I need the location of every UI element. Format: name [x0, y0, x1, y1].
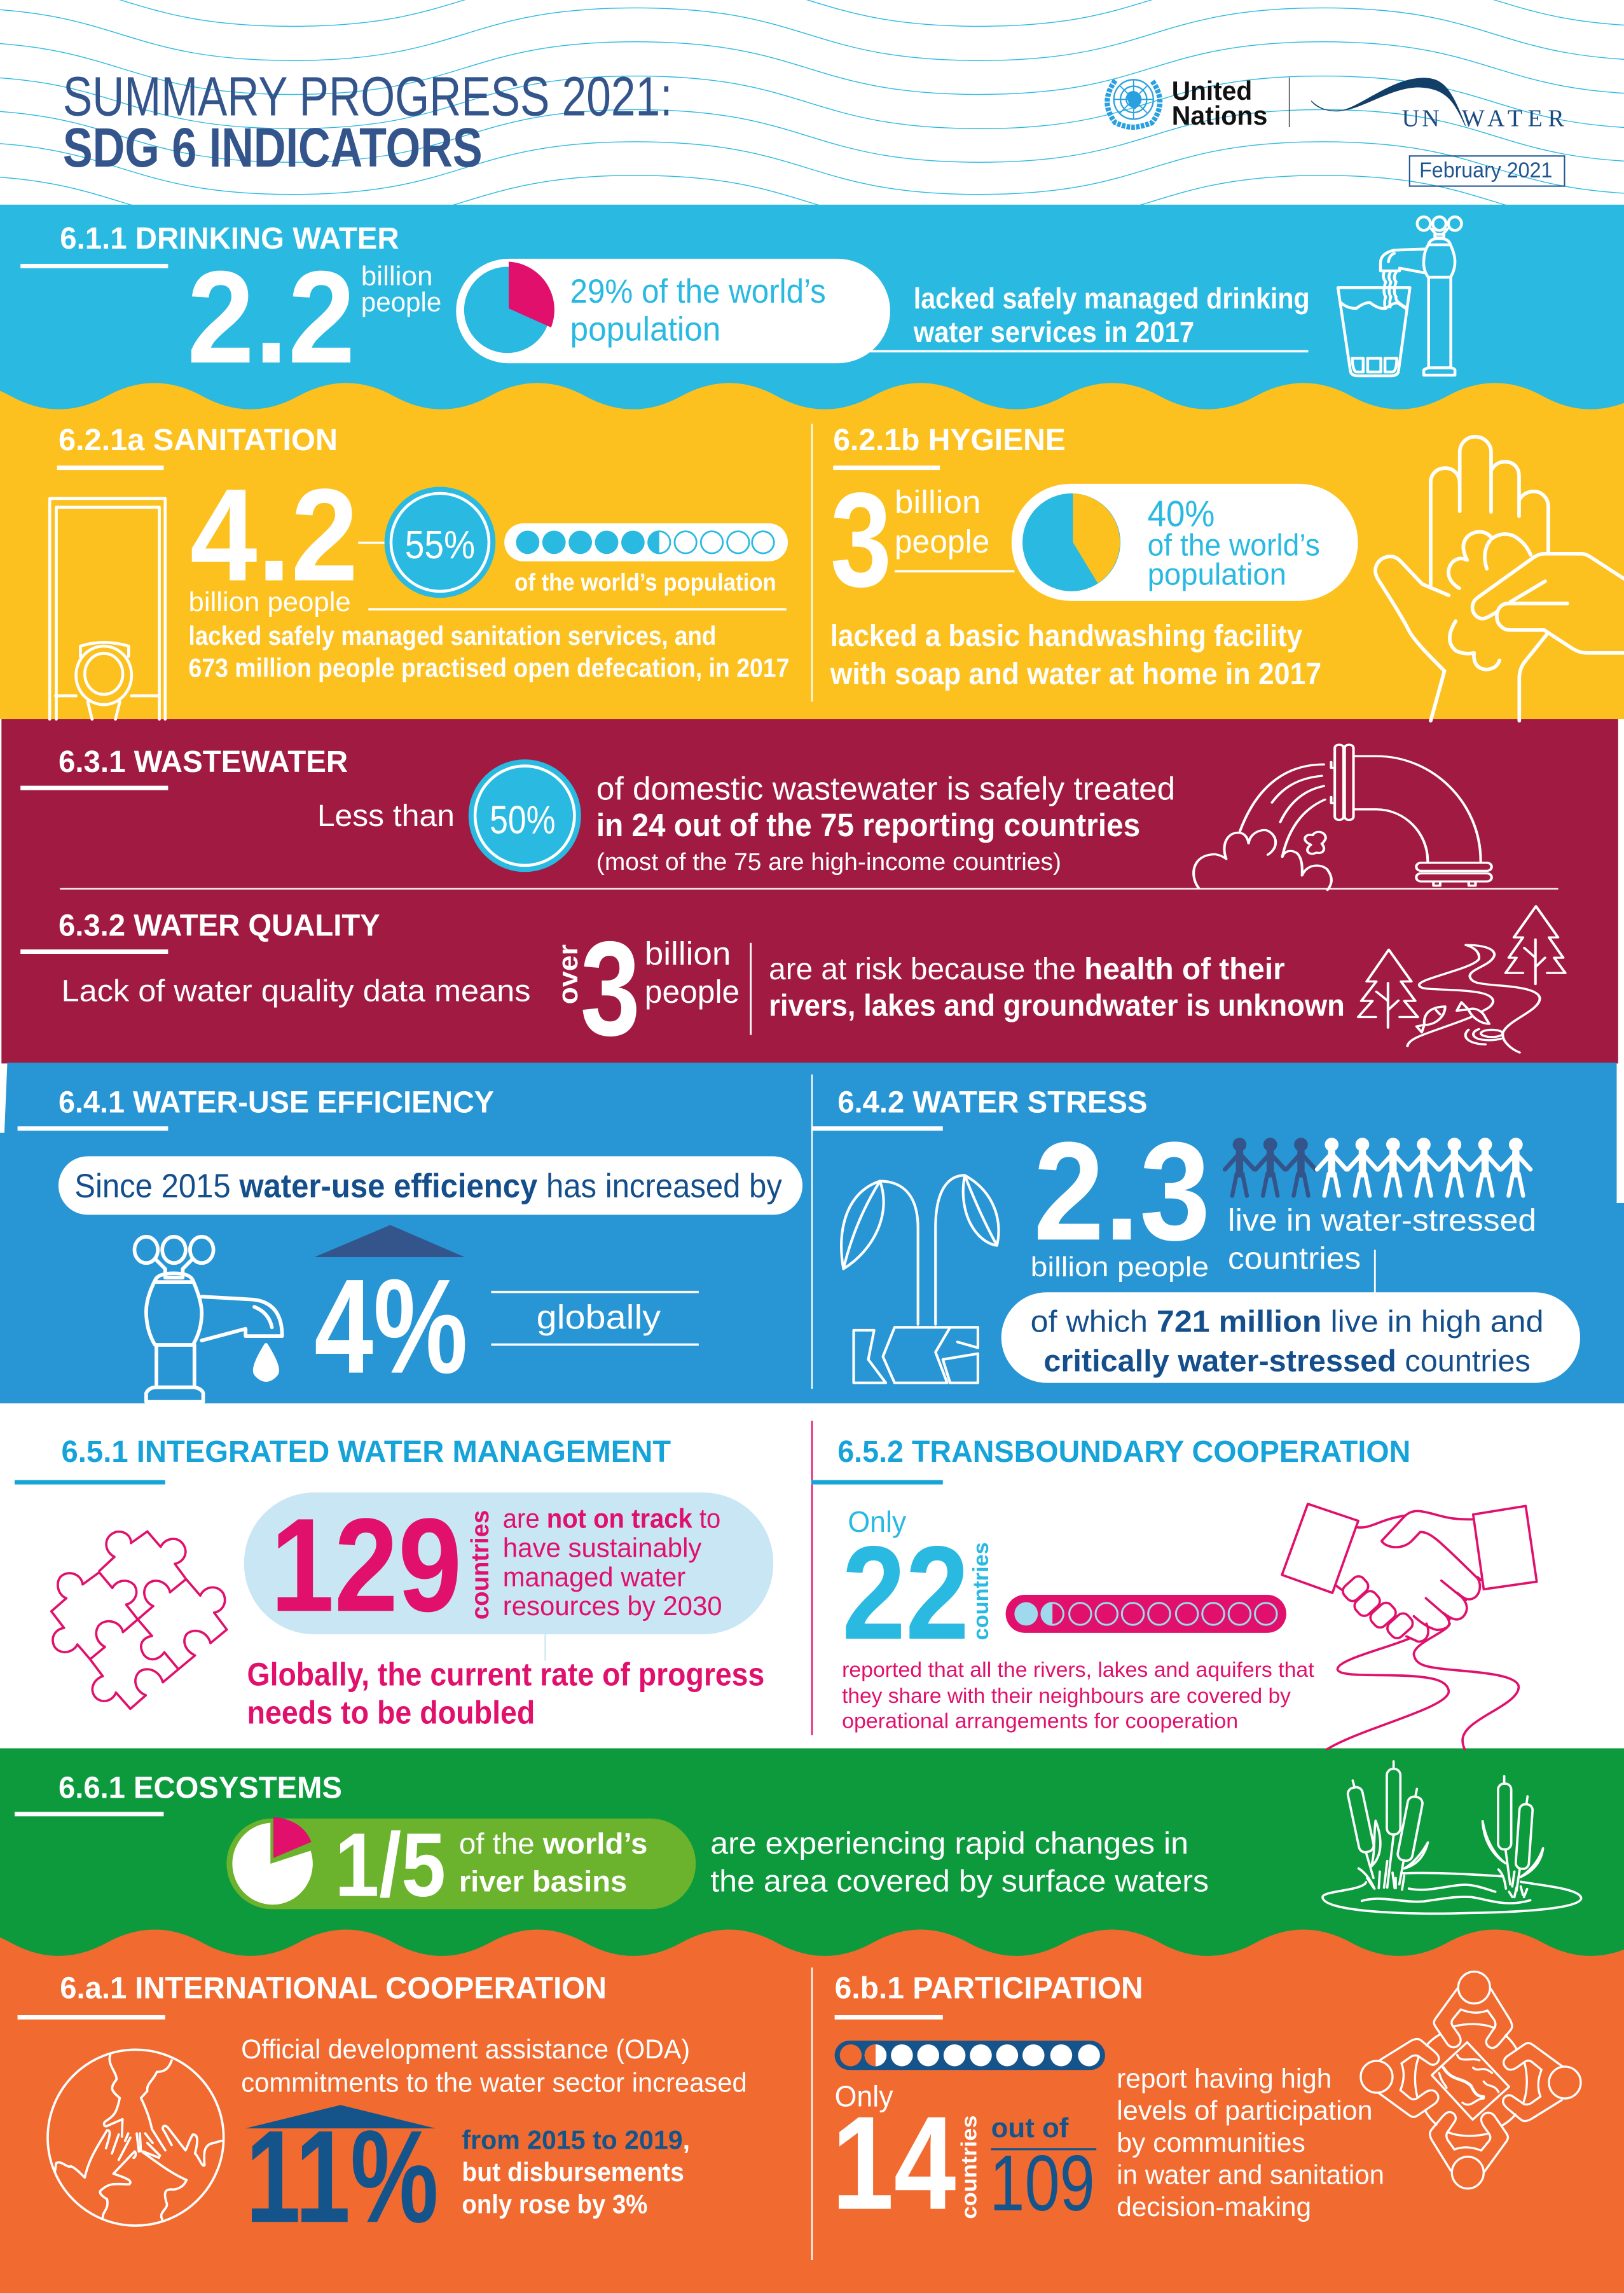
big number 11%: 11%	[245, 2103, 439, 2250]
heading: 6.6.1: 6.6.1 ECOSYSTEMS	[58, 1771, 342, 1805]
text: from 2015 to 2019: from 2015 to 2019,	[462, 2125, 690, 2154]
heading: 6.a.1: 6.a.1 INTERNATIONAL COOPERATION	[60, 1971, 607, 2006]
big number: only 22 countries: 22	[842, 1519, 969, 1667]
dot scale: 55% of the world's population	[504, 523, 788, 596]
heading: 6.3.1	[20, 745, 348, 790]
text: live in water-stressed	[1228, 1203, 1536, 1293]
panel: ecosystems background	[0, 1748, 1624, 1960]
pill with pie: 29%: population	[570, 311, 720, 348]
big number: only 14 countries out of 109	[832, 2080, 1096, 2238]
text: sanitation services	[189, 608, 789, 682]
icon: washing hands	[1375, 437, 1624, 720]
pill: 129 countries	[244, 1491, 773, 1639]
pill: 721 million	[1001, 1292, 1580, 1383]
icon: reeds in pond	[1323, 1761, 1581, 1913]
text: lacked safely managed drinking water	[862, 282, 1310, 352]
dot scale: 55% of the world's population: of the world’s population	[514, 570, 776, 596]
heading: 6.1.1	[20, 221, 399, 268]
icon: outflow pipe	[1194, 745, 1492, 890]
panel: cooperation and participation background	[0, 1930, 1624, 2293]
pill: 129 countries: are not on track to	[503, 1504, 720, 1534]
big number 3 billion people	[830, 465, 1014, 615]
arrow: increase	[245, 2105, 436, 2128]
text: domestic wastewater	[596, 770, 1175, 876]
text: sanitation services: lacked safely managed sanitation services, and	[189, 621, 716, 651]
title	[63, 65, 672, 179]
text: from 2015 to 2019	[462, 2125, 690, 2219]
text: lacked safely managed drinking water: lacked safely managed drinking	[914, 282, 1310, 315]
text: reported: operational arrangements for cooperation	[842, 1709, 1238, 1733]
section 6.1.1 drinking water	[20, 217, 1461, 390]
people chain: three in ten	[1225, 1138, 1531, 1195]
text: rate of progress: Globally, the current rate of progress	[247, 1656, 764, 1693]
big number 2.2 billion people: 2.2	[187, 244, 355, 390]
text: report having high: by communities	[1117, 2128, 1305, 2158]
text: reported	[842, 1658, 1314, 1733]
big number 4.2 billion people: billion people	[189, 588, 351, 617]
text: official development assistance	[241, 2035, 747, 2098]
text: report having high	[1117, 2064, 1384, 2222]
text: rate of progress: needs to be doubled	[247, 1694, 535, 1730]
heading: 6.a.1	[18, 1971, 607, 2020]
heading: 6.4.1	[18, 1085, 494, 1131]
big number: only 22 countries: countries	[969, 1542, 993, 1640]
text: lack of data: Lack of water quality data means	[62, 974, 530, 1009]
header background waves	[0, 0, 1624, 228]
pill with pie: 29%	[456, 259, 890, 363]
heading: 6.1.1: 6.1.1 DRINKING WATER	[60, 221, 399, 256]
heading: 6.b.1: 6.b.1 PARTICIPATION	[835, 1971, 1143, 2006]
icon: tap and glass	[1338, 217, 1461, 376]
heading: 6.5.1	[15, 1435, 671, 1484]
big number: only 22 countries: Only	[848, 1505, 906, 1538]
big number 3 billion people: billion	[895, 484, 981, 520]
text: domestic wastewater: in 24 out of the 75 reporting countries	[596, 807, 1140, 843]
logo: United Nations: Nations	[1172, 101, 1267, 130]
heading: 6.4.2	[811, 1085, 1148, 1131]
text: at risk: are at risk because the health of their	[769, 952, 1285, 986]
heading: 6.3.2: 6.3.2 WATER QUALITY	[58, 908, 380, 942]
text: report having high: report having high	[1117, 2064, 1332, 2094]
big number 2.2 billion people: billion	[361, 261, 432, 291]
pill: since 2015	[58, 1156, 802, 1215]
text: from 2015 to 2019: but disbursements	[462, 2158, 684, 2187]
circle: 55%: 55%	[405, 523, 475, 567]
heading: 6.2.1a: 6.2.1a SANITATION	[58, 423, 338, 457]
big number: over 3 billion people: billion	[645, 935, 731, 972]
big number: only 14 countries out of 109: 14	[832, 2090, 956, 2238]
panel: sanitation and hygiene background	[0, 383, 1624, 719]
text: at risk: rivers, lakes and groundwater is unknown	[769, 989, 1345, 1023]
heading: 6.4.2: 6.4.2 WATER STRESS	[837, 1085, 1148, 1119]
icon: river, trees and fish	[1358, 906, 1566, 1052]
icon: handshake and river	[1282, 1504, 1537, 1749]
logo: UN Water	[1290, 78, 1564, 132]
section 6.5.1 integrated water management	[15, 1435, 773, 1730]
heading: 6.6.1	[15, 1771, 342, 1816]
heading: 6.4.1: 6.4.1 WATER-USE EFFICIENCY	[58, 1085, 494, 1119]
divider: efficiency stress	[811, 1075, 813, 1389]
section 6.4.1 water-use efficiency	[18, 1085, 802, 1402]
icon: dripping tap	[134, 1237, 282, 1402]
text: rapid changes: the area covered by surface waters	[710, 1864, 1209, 1899]
big number 4%: 4%	[314, 1251, 468, 1401]
pill with pie: 40%: population	[1148, 558, 1286, 592]
logo: United Nations	[1107, 76, 1267, 130]
big number 2.2 billion people: people	[361, 288, 441, 318]
pill: 129 countries: 129	[270, 1491, 462, 1639]
pill with pie: 40%	[1012, 484, 1358, 601]
heading: 6.5.1: 6.5.1 INTEGRATED WATER MANAGEMENT	[62, 1435, 671, 1469]
divider: management cooperation	[811, 1421, 813, 1735]
pill with pie: 40%: of the world’s	[1148, 528, 1320, 563]
text: at risk	[769, 952, 1345, 1023]
big number: over 3 billion people: 3	[581, 914, 640, 1064]
section 6.2.1b hygiene	[830, 423, 1624, 720]
circle: 55%	[358, 487, 495, 598]
logo: UN Water: WATER	[1462, 105, 1564, 132]
text: handwashing facility: lacked a basic handwashing facility	[830, 619, 1302, 653]
pill: 129 countries: have sustainably	[503, 1533, 702, 1563]
big number: only 14 countries out of 109: Only	[835, 2080, 893, 2113]
divider: cooperation participation	[811, 1967, 813, 2260]
arrow: increase	[314, 1225, 465, 1257]
big number 2.3 billion people: billion people	[1031, 1251, 1209, 1283]
logo: United Nations: United	[1172, 76, 1252, 106]
big number: only 14 countries out of 109: out of	[991, 2112, 1069, 2144]
pill: one fifth of river basins: of the world’s	[459, 1827, 647, 1860]
section 6.2.1a sanitation	[50, 423, 789, 719]
big number: over 3 billion people	[553, 914, 752, 1064]
divider: wastewater quality	[60, 888, 1559, 890]
section 6.3.1 wastewater	[20, 745, 1492, 890]
text: less than: Less than	[317, 799, 455, 833]
heading: 6.5.2: 6.5.2 TRANSBOUNDARY COOPERATION	[837, 1435, 1410, 1469]
icon: toilet door	[50, 499, 165, 719]
pill: one fifth of river basins: river basins	[459, 1865, 627, 1898]
pill: 129 countries: resources by 2030	[503, 1592, 722, 1622]
pill: one fifth of river basins: 1/5	[334, 1815, 446, 1916]
big number 3 billion people: 3	[830, 465, 891, 615]
heading: 6.3.2	[20, 908, 380, 954]
heading: 6.5.2	[811, 1435, 1410, 1484]
section 6.5.2 transboundary cooperation	[811, 1435, 1537, 1749]
text: reported: they share with their neighbours are covered by	[842, 1684, 1291, 1708]
title: SDG 6 INDICATORS	[63, 116, 483, 179]
big number 3 billion people: people	[895, 523, 989, 560]
big number: only 14 countries out of 109: countries	[958, 2115, 982, 2219]
circle: 50%	[469, 759, 581, 872]
big number 4.2 billion people: 4.2	[190, 462, 358, 609]
text: handwashing facility: with soap and water at home in 2017	[830, 657, 1321, 691]
section 6.b.1 participation	[832, 1971, 1581, 2238]
icon: people around a map	[1361, 1972, 1581, 2189]
text: live in water-stressed: live in water-stressed	[1228, 1203, 1536, 1238]
text: report having high: in water and sanitation	[1117, 2161, 1384, 2191]
icon: wilting plant	[841, 1175, 998, 1383]
panel: water efficiency and stress background	[0, 1063, 1624, 1403]
heading: 6.3.1: 6.3.1 WASTEWATER	[58, 745, 348, 779]
text: handwashing facility	[830, 619, 1321, 691]
dot scale: 14 of 109	[835, 2041, 1105, 2070]
section 6.6.1 ecosystems	[15, 1761, 1581, 1916]
text: rapid changes	[710, 1826, 1209, 1899]
text: official development assistance: Official development assistance (ODA)	[241, 2035, 690, 2065]
pill: 721 million: of which 721 million live in high and	[1031, 1304, 1544, 1339]
pill: since 2015: Since 2015 water-use efficiency has increased by	[74, 1167, 782, 1205]
date box: February 2021	[1419, 158, 1552, 182]
text: rate of progress	[247, 1634, 764, 1730]
heading: 6.2.1b: 6.2.1b HYGIENE	[833, 423, 1066, 457]
text: domestic wastewater: (most of the 75 are high-income countries)	[596, 849, 1061, 876]
panel: wastewater and water quality background	[1, 719, 1618, 1063]
pill with pie: 40%: 40%	[1148, 494, 1215, 535]
text: sanitation services: 673 million people practised open defecation, in 2017	[189, 653, 789, 682]
text: report having high: decision-making	[1117, 2193, 1311, 2222]
pill with pie: 29%: 29% of the world’s	[570, 273, 826, 310]
section 6.3.2 water quality	[20, 906, 1566, 1064]
icon: puzzle	[52, 1531, 227, 1709]
dot scale: 22 countries	[1006, 1595, 1286, 1633]
text: domestic wastewater: of domestic wastewater is safely treated	[596, 770, 1175, 806]
divider: sanitation hygiene	[811, 424, 813, 701]
panel: drinking water background	[0, 205, 1624, 417]
big number: only 14 countries out of 109: 109	[989, 2140, 1095, 2228]
text: official development assistance: commitments to the water sector increased	[241, 2069, 747, 2098]
text: from 2015 to 2019: only rose by 3%	[462, 2189, 647, 2219]
text: lacked safely managed drinking water: water services in 2017	[913, 315, 1194, 348]
big number: over 3 billion people: people	[645, 974, 740, 1010]
section 6.4.2 water stress	[811, 1085, 1580, 1383]
pill: one fifth of river basins	[226, 1815, 696, 1916]
section 6.a.1 international cooperation	[18, 1971, 747, 2250]
text: globally: globally	[537, 1299, 661, 1337]
text: report having high: levels of participation	[1117, 2096, 1373, 2126]
text: live in water-stressed: countries	[1228, 1241, 1361, 1276]
circle: 50%: 50%	[490, 798, 556, 842]
title: SUMMARY PROGRESS 2021:	[63, 65, 672, 128]
pill: 129 countries: countries	[467, 1510, 494, 1620]
text: reported: reported that all the rivers, lakes and aquifers that	[842, 1658, 1314, 1682]
pill: 721 million: critically water-stressed countries	[1043, 1344, 1531, 1378]
icon: hands on globe	[48, 2049, 224, 2226]
text: globally	[491, 1291, 699, 1346]
text: rapid changes: are experiencing rapid changes in	[710, 1826, 1188, 1861]
big number 2.3 billion people: 2.3	[1033, 1112, 1210, 1269]
logo: UN Water: UN	[1402, 105, 1440, 132]
pill: 129 countries: managed water	[503, 1562, 685, 1592]
big number: over 3 billion people: over	[553, 944, 584, 1004]
